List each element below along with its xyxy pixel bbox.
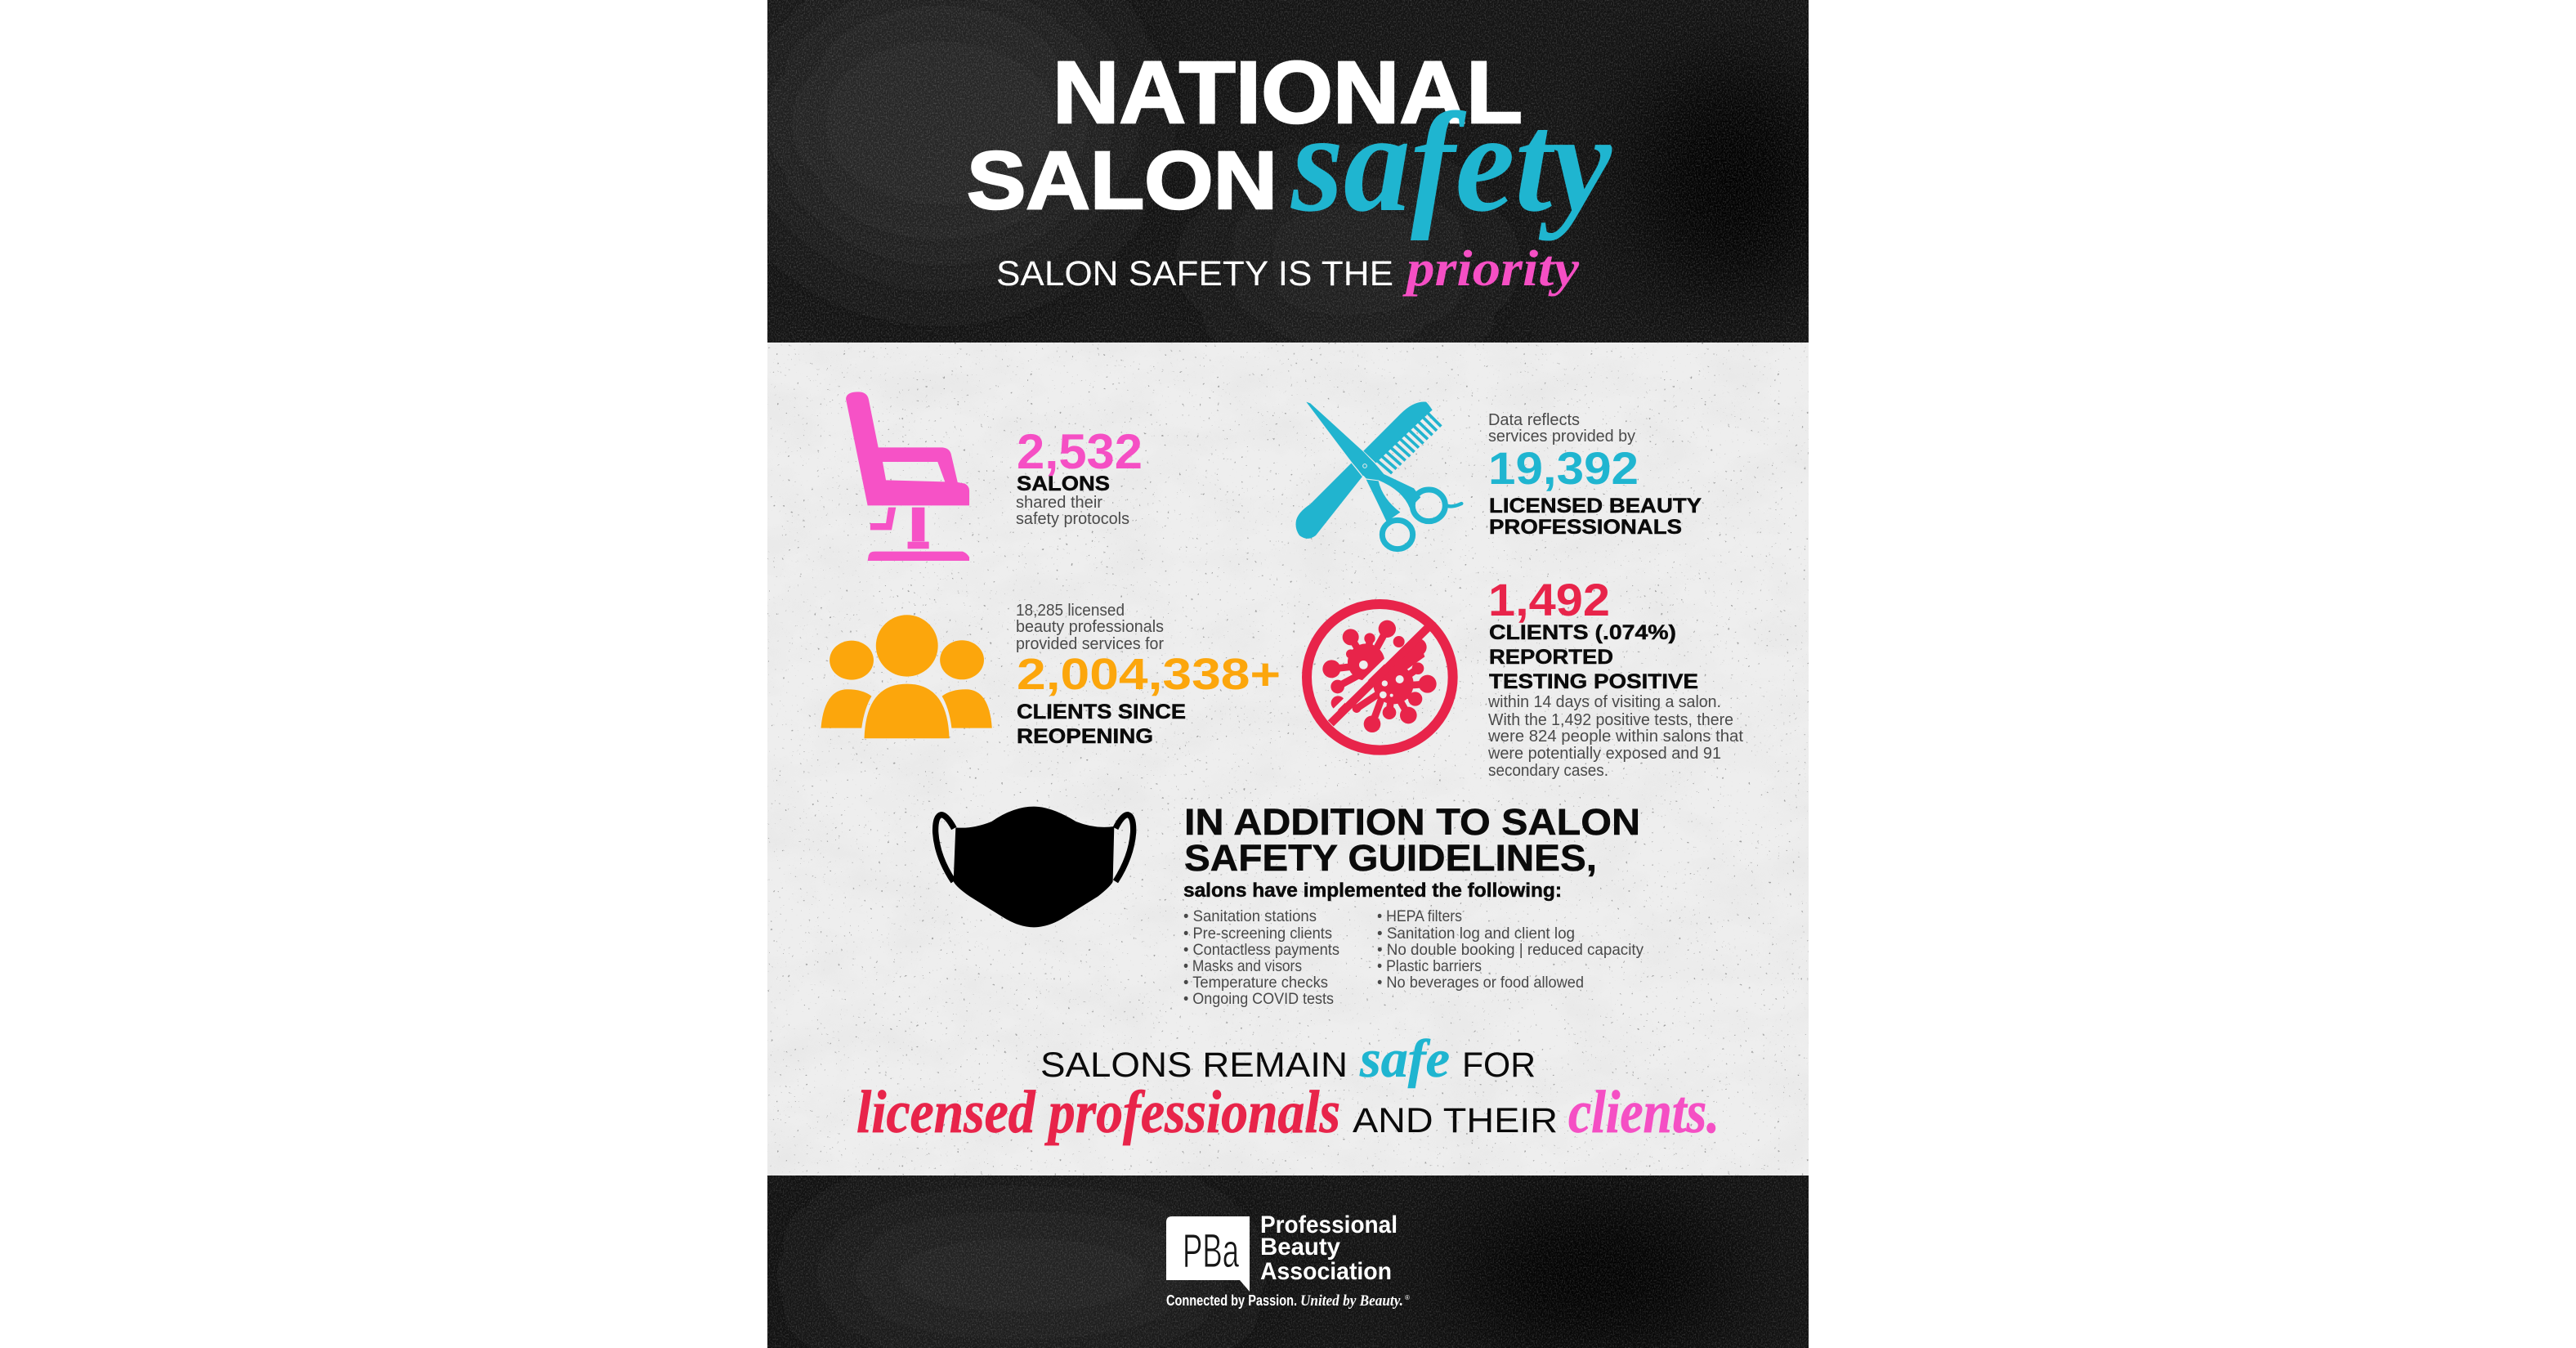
logo: Professional Beauty Association bbox=[1166, 1211, 1410, 1310]
closing statement bbox=[856, 1029, 1720, 1146]
stat: 19,392 licensed beauty professionals: LICENSED BEAUTY bbox=[1489, 495, 1702, 517]
heading: in addition to salon safety guidelines: salons have implemented the following: bbox=[1183, 880, 1562, 902]
heading: in addition to salon safety guidelines bbox=[1183, 801, 1640, 902]
stat: 1,492 clients reported testing positive: were 824 people within salons that bbox=[1487, 728, 1743, 746]
list: safety measures column one: • Ongoing COVID tests bbox=[1183, 990, 1334, 1008]
stat: 19,392 licensed beauty professionals bbox=[1488, 411, 1702, 539]
logo: Professional Beauty Association: United by Beauty. bbox=[1300, 1292, 1403, 1310]
stat: 1,492 clients reported testing positive: within 14 days of visiting a salon. bbox=[1487, 693, 1721, 711]
stat: 2,532 salons: 2,532 bbox=[1017, 424, 1143, 479]
stat: 19,392 licensed beauty professionals: services provided by bbox=[1488, 428, 1635, 446]
subtitle bbox=[996, 241, 1580, 297]
stat: 19,392 licensed beauty professionals: Data reflects bbox=[1488, 411, 1580, 429]
list: safety measures column two: • No beverages or food allowed bbox=[1377, 974, 1584, 992]
stat: 1,492 clients reported testing positive: 1,492 bbox=[1488, 574, 1610, 625]
panel: bottom dark footer background bbox=[767, 1176, 1809, 1348]
stat: 1,492 clients reported testing positive: were potentially exposed and 91 bbox=[1487, 745, 1721, 763]
list: safety measures column one: • Contactless payments bbox=[1183, 941, 1339, 959]
panel: light concrete body background bbox=[767, 343, 1809, 1176]
list: safety measures column two bbox=[1377, 907, 1644, 992]
icon: virus prohibited bbox=[1307, 604, 1453, 750]
icon: group of people bbox=[821, 615, 992, 738]
stat: 2,532 salons: safety protocols bbox=[1016, 510, 1129, 528]
title bbox=[967, 43, 1612, 241]
subtitle: SALON SAFETY IS THE bbox=[996, 254, 1393, 293]
stat: 19,392 licensed beauty professionals: PROFESSIONALS bbox=[1489, 516, 1682, 539]
list: safety measures column two: • Sanitation log and client log bbox=[1377, 925, 1575, 943]
stat: 2,004,338+ clients since reopening: beauty professionals bbox=[1016, 618, 1164, 636]
stat: 1,492 clients reported testing positive: TESTING POSITIVE bbox=[1489, 670, 1698, 693]
stat: 2,004,338+ clients since reopening: REOPENING bbox=[1017, 725, 1153, 748]
list: safety measures column one: • Pre-screening clients bbox=[1183, 925, 1332, 943]
icon: face mask bbox=[936, 807, 1134, 927]
logo: Professional Beauty Association: ® bbox=[1405, 1294, 1410, 1301]
closing statement: clients. bbox=[1568, 1079, 1720, 1146]
heading: in addition to salon safety guidelines: SAFETY GUIDELINES, bbox=[1184, 837, 1597, 879]
title: NATIONAL bbox=[1053, 43, 1523, 141]
stat: 2,004,338+ clients since reopening: 18,285 licensed bbox=[1016, 602, 1125, 620]
list: safety measures column one: • Sanitation stations bbox=[1183, 907, 1317, 925]
list: safety measures column two: • Plastic barriers bbox=[1377, 957, 1482, 975]
stat: 2,004,338+ clients since reopening: provided services for bbox=[1016, 635, 1164, 653]
closing statement: licensed professionals bbox=[856, 1079, 1340, 1146]
panel: top dark header background bbox=[760, 0, 1831, 343]
list: safety measures column two: • HEPA filters bbox=[1377, 907, 1462, 925]
closing statement: SALONS REMAIN bbox=[1040, 1046, 1348, 1085]
logo: Professional Beauty Association: Connected by Passion. bbox=[1166, 1292, 1297, 1309]
stat: 1,492 clients reported testing positive: CLIENTS (.074%) bbox=[1489, 621, 1676, 644]
closing statement: FOR bbox=[1462, 1046, 1536, 1085]
closing statement: safe bbox=[1359, 1029, 1450, 1089]
list: safety measures column one: • Temperature checks bbox=[1183, 974, 1328, 992]
stat: 1,492 clients reported testing positive bbox=[1487, 574, 1743, 780]
logo: Professional Beauty Association: Association bbox=[1260, 1258, 1392, 1285]
logo: Professional Beauty Association: Professional bbox=[1260, 1211, 1398, 1238]
list: safety measures column one bbox=[1183, 907, 1339, 1008]
stat: 2,004,338+ clients since reopening: 2,004,338+ bbox=[1017, 650, 1281, 699]
logo: Professional Beauty Association: PBa bbox=[1183, 1225, 1239, 1278]
stat: 2,532 salons: shared their bbox=[1016, 494, 1102, 512]
stat: 1,492 clients reported testing positive: secondary cases. bbox=[1488, 762, 1608, 780]
title: safety bbox=[1290, 83, 1612, 241]
stat: 2,004,338+ clients since reopening bbox=[1016, 602, 1281, 748]
stat: 2,532 salons bbox=[1016, 424, 1143, 528]
list: safety measures column two: • No double booking | reduced capacity bbox=[1377, 941, 1644, 959]
title: SALON bbox=[967, 135, 1277, 226]
stat: 2,004,338+ clients since reopening: CLIENTS SINCE bbox=[1017, 701, 1186, 723]
subtitle: priority bbox=[1402, 241, 1580, 297]
stat: 2,532 salons: SALONS bbox=[1017, 472, 1110, 495]
closing statement: AND THEIR bbox=[1353, 1101, 1558, 1140]
icon: comb and scissors bbox=[1295, 402, 1461, 549]
stat: 1,492 clients reported testing positive: With the 1,492 positive tests, there bbox=[1488, 711, 1733, 729]
logo: Professional Beauty Association: Beauty bbox=[1260, 1234, 1340, 1261]
icon: salon chair bbox=[846, 392, 969, 561]
list: safety measures column one: • Masks and visors bbox=[1183, 957, 1302, 975]
stat: 19,392 licensed beauty professionals: 19,392 bbox=[1488, 442, 1639, 494]
stat: 1,492 clients reported testing positive: REPORTED bbox=[1489, 646, 1613, 669]
heading: in addition to salon safety guidelines: IN ADDITION TO SALON bbox=[1184, 801, 1640, 843]
